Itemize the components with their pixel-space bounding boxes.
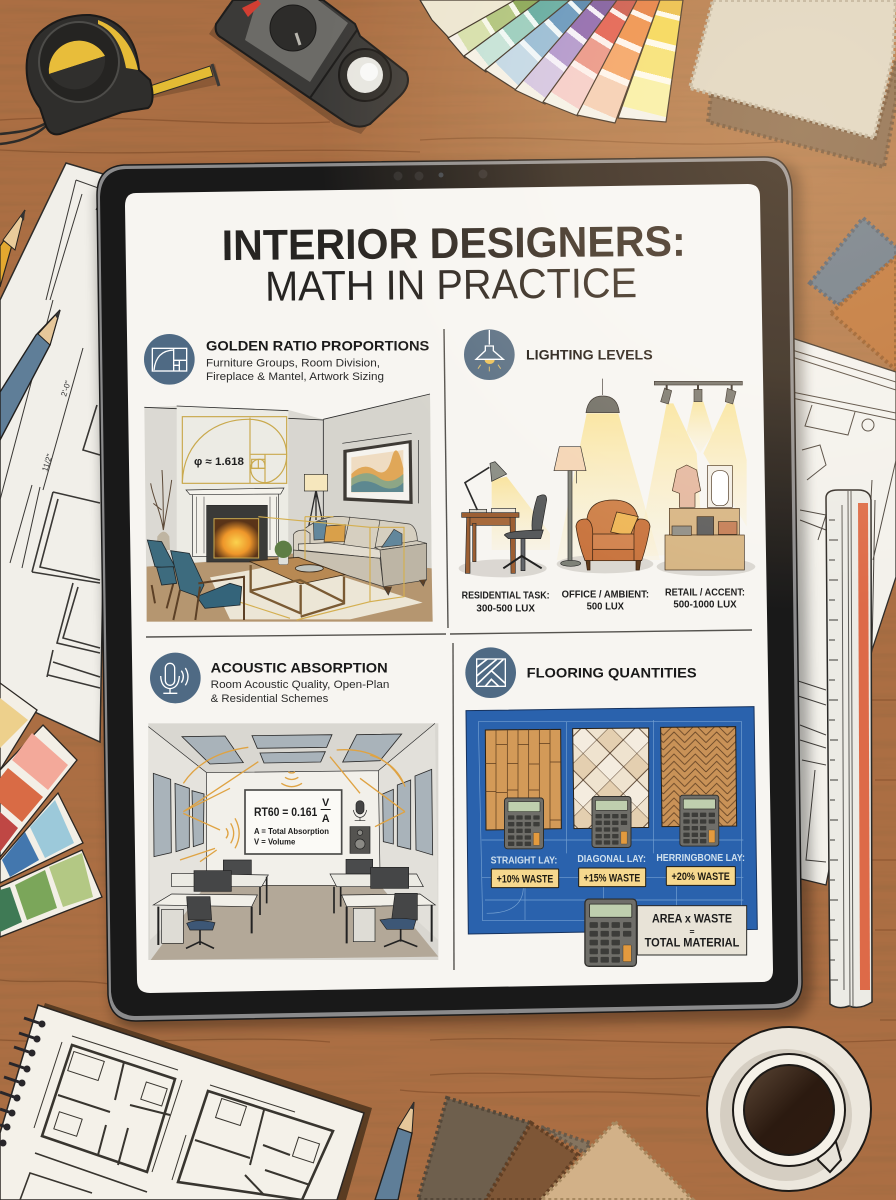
blueprint sheet left: 2'-0"	[59, 380, 73, 398]
formula: V	[322, 797, 330, 809]
tablet shadow	[96, 161, 813, 1030]
formula: RT60 = 0.161	[254, 805, 318, 819]
subtitle: Furniture Groups, Room Division,	[206, 358, 380, 370]
whiteboard	[245, 790, 342, 854]
straight lay swatch	[485, 729, 561, 830]
right desks	[330, 859, 435, 947]
icon: microphone	[150, 653, 201, 703]
floor lamp	[304, 474, 328, 528]
blueprint sheet right	[792, 338, 896, 885]
left desks	[153, 860, 268, 948]
plant and vase	[151, 470, 292, 565]
ceiling panels	[182, 734, 402, 764]
title line 2: MATH IN PRACTICE	[265, 259, 637, 310]
formula: A	[322, 813, 330, 825]
desk and task lamp	[462, 462, 519, 573]
heading: GOLDEN RATIO PROPORTIONS	[206, 338, 429, 354]
coffee table	[249, 557, 345, 617]
calculator 2	[592, 796, 631, 847]
heading: ACOUSTIC ABSORPTION	[211, 660, 388, 676]
coffee cup	[707, 1027, 871, 1191]
formula: A = Total Absorption	[254, 826, 329, 836]
total formula box: =	[689, 927, 695, 937]
title line 1: INTERIOR DESIGNERS:	[221, 218, 686, 270]
spiral binding	[0, 1018, 44, 1145]
sofa	[293, 516, 427, 595]
lux labels	[462, 587, 745, 614]
wall panels	[153, 769, 433, 857]
living room illustration	[144, 394, 433, 622]
waste badges	[491, 867, 735, 888]
heading: LIGHTING LEVELS	[526, 346, 653, 362]
floor plan 2	[172, 1085, 333, 1200]
notebook with floor plans	[0, 1003, 372, 1200]
blueprint sheet left: 11/2"	[40, 453, 54, 473]
office chair	[503, 495, 547, 571]
colour cards left	[0, 683, 102, 937]
heading: FLOORING QUANTITIES	[527, 664, 697, 680]
floor plan 3	[20, 1153, 147, 1200]
herringbone lay swatch	[661, 727, 737, 827]
waste badges: +15% WASTE	[584, 872, 640, 884]
lay labels: STRAIGHT LAY:	[491, 855, 557, 866]
subtitle: & Residential Schemes	[211, 693, 329, 705]
ruler	[826, 490, 872, 1008]
total formula box: AREA x WASTE	[652, 913, 732, 926]
panel: acoustic absorption	[148, 653, 438, 960]
microphone and speaker	[350, 801, 370, 853]
dividers	[146, 329, 752, 970]
fireplace	[186, 488, 284, 562]
large calculator	[585, 899, 636, 966]
floor lamp	[554, 447, 586, 566]
lay labels	[491, 853, 745, 866]
icon: golden ratio	[144, 334, 195, 385]
pencil bottom	[375, 1102, 414, 1200]
light cones	[492, 402, 747, 560]
sound arrows	[180, 747, 405, 862]
diagonal lay swatch	[573, 728, 649, 829]
lux labels: 500 LUX	[587, 601, 624, 612]
retail display	[665, 465, 744, 570]
fabric samples top right	[690, 0, 896, 167]
panel: flooring quantities	[465, 647, 757, 966]
subtitle: Fireplace & Mantel, Artwork Sizing	[206, 371, 384, 383]
pencil blue	[0, 310, 60, 440]
waste badges: +10% WASTE	[497, 873, 553, 885]
total formula box	[637, 906, 747, 955]
gold overlay	[233, 517, 404, 620]
formula	[254, 797, 331, 846]
fabric samples right	[810, 218, 896, 370]
colour swatch fan	[420, 0, 683, 123]
waste badges: +20% WASTE	[671, 871, 730, 883]
subtitle	[206, 358, 384, 383]
calculator 3	[680, 795, 719, 846]
golden spiral	[182, 417, 287, 483]
lux labels: 300-500 LUX	[476, 603, 535, 614]
icon: herringbone	[465, 647, 516, 698]
lux labels: OFFICE / AMBIENT:	[562, 589, 649, 600]
armchair	[576, 500, 650, 570]
light meter	[209, 0, 408, 134]
subtitle	[211, 679, 389, 705]
total formula box: TOTAL MATERIAL	[645, 937, 739, 950]
lux labels: RETAIL / ACCENT:	[665, 587, 745, 598]
framed artwork	[342, 433, 418, 504]
blueprint sheet left	[0, 163, 110, 742]
lux labels: 500-1000 LUX	[673, 599, 737, 610]
blueprint background	[466, 707, 757, 934]
armchairs	[147, 540, 245, 620]
title	[221, 218, 686, 310]
pencil yellow	[0, 210, 25, 287]
formula: V = Volume	[254, 836, 295, 846]
spotlight track and pendant	[586, 379, 742, 413]
tape measure	[0, 15, 220, 144]
office illustration	[148, 723, 438, 960]
tablet frame	[97, 157, 802, 1021]
camera dots	[394, 170, 488, 180]
fabric samples bottom	[418, 1098, 693, 1200]
lux labels: RESIDENTIAL TASK:	[462, 591, 550, 602]
ratio label: φ ≈ 1.618	[194, 456, 244, 468]
floor plan 1	[34, 1036, 182, 1172]
subtitle: Room Acoustic Quality, Open-Plan	[211, 679, 389, 691]
floor shadows	[459, 555, 755, 577]
panel: lighting levels	[459, 329, 755, 614]
lay labels: DIAGONAL LAY:	[577, 854, 646, 865]
panel: golden ratio	[144, 334, 433, 622]
lay labels: HERRINGBONE LAY:	[656, 853, 745, 864]
tablet	[97, 157, 802, 1021]
calculator 1	[504, 798, 543, 849]
icon: pendant lamp	[464, 329, 515, 380]
tablet screen	[125, 184, 773, 993]
